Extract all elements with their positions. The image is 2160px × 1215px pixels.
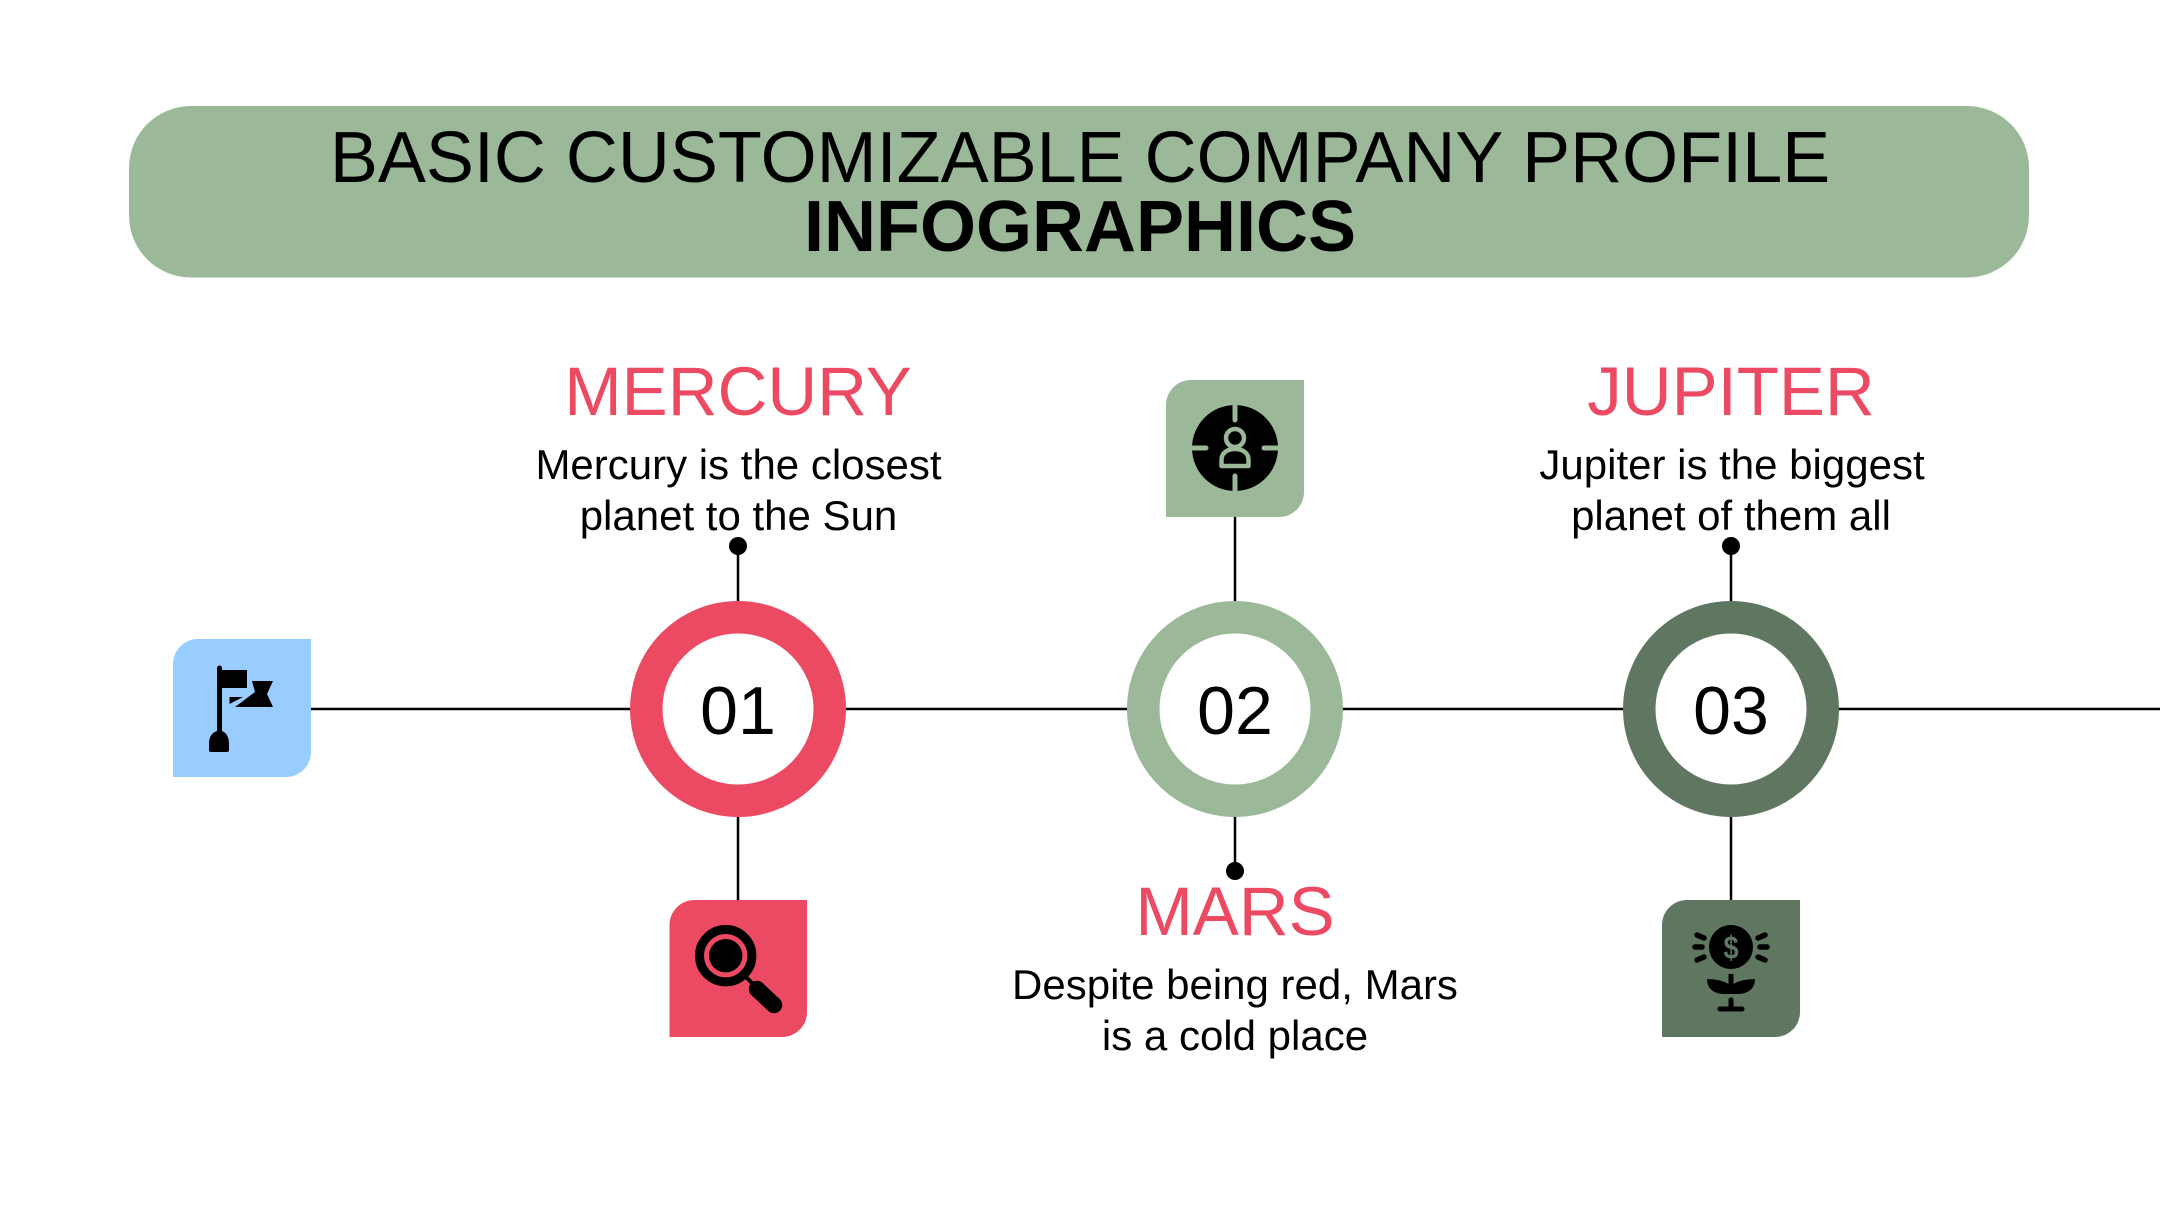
heading: Jupiter: JUPITER (1587, 353, 1875, 430)
icon: money plant on dark green tile (1662, 900, 1800, 1037)
subtitle: INFOGRAPHICS (804, 187, 1356, 267)
number ring 02 (1143, 617, 1327, 801)
connector dots (729, 537, 1740, 880)
panel: step 03 Jupiter: planet of them all (1571, 492, 1891, 539)
heading: Mars: MARS (1135, 873, 1335, 950)
text: Jupiter description: Jupiter is the biggest (1539, 441, 1925, 488)
icon: magnifier on red tile (670, 900, 807, 1037)
title banner (129, 106, 2029, 278)
text: Mars description: Despite being red, Mars (1012, 961, 1458, 1008)
title: BASIC CUSTOMIZABLE COMPANY PROFILE (330, 118, 1830, 198)
panel: step 02 Mars: is a cold place (1102, 1012, 1368, 1059)
number ring 03 (1639, 617, 1823, 801)
text: Mercury description: Mercury is the closest (535, 441, 942, 488)
number ring 02: 02 (1197, 673, 1273, 749)
heading: Mercury: MERCURY (564, 353, 912, 430)
icon: person target on green tile (1166, 380, 1304, 517)
panel: step 02 Mars (1012, 873, 1458, 1059)
timeline line (311, 517, 2160, 900)
number ring 01: 01 (700, 673, 776, 749)
icon: flags on blue tile (173, 639, 311, 777)
panel: step 01 Mercury: planet to the Sun (580, 492, 897, 539)
number ring 03: 03 (1693, 673, 1769, 749)
panel: step 01 Mercury (535, 353, 942, 539)
icon: money plant on dark green tile: $ (1723, 930, 1739, 966)
number ring 01 (646, 617, 830, 801)
panel: step 03 Jupiter (1539, 353, 1925, 539)
